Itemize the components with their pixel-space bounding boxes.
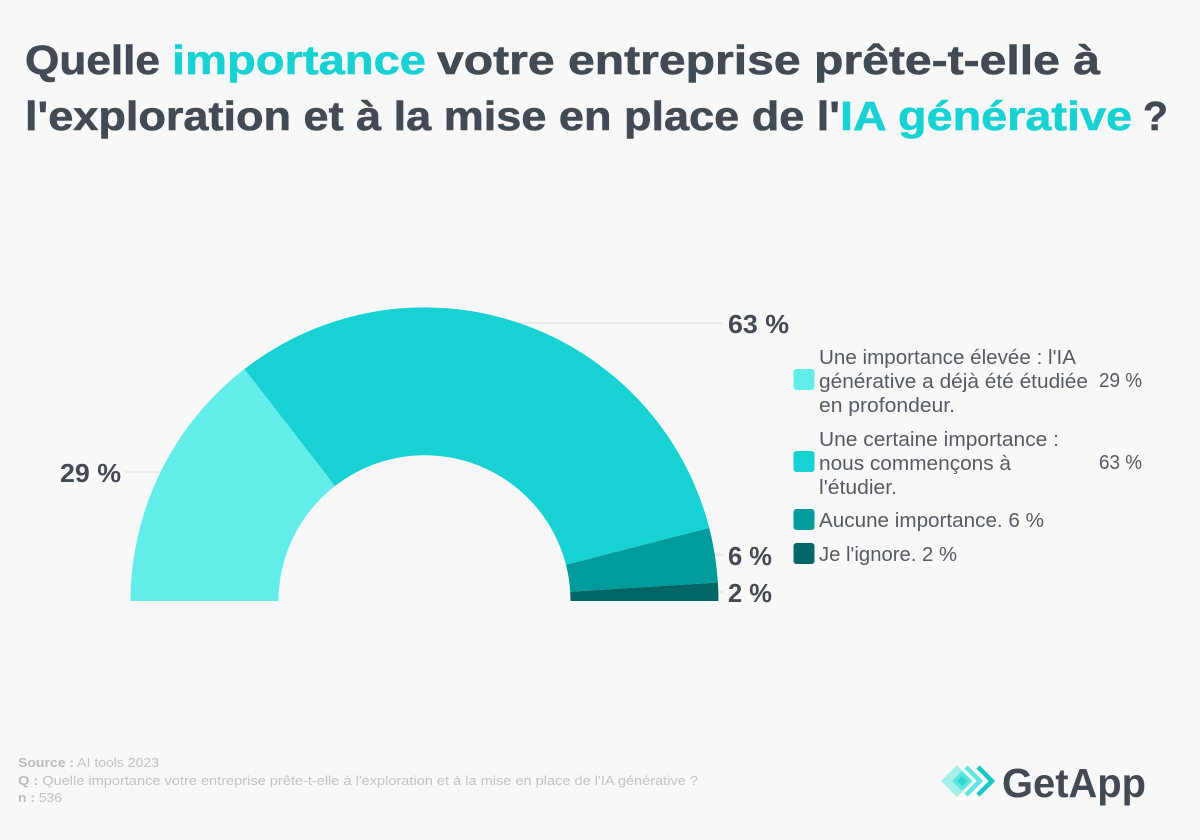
semi-donut chart	[60, 307, 789, 608]
source notes	[18, 755, 698, 805]
segment: 6 %	[566, 528, 718, 592]
leader lines	[125, 323, 724, 592]
data labels: 6 %	[728, 541, 772, 571]
legend item: 29 %: en profondeur.	[819, 395, 955, 417]
data labels	[60, 309, 789, 608]
title: IA générative	[840, 93, 1132, 139]
segment: 63 %	[244, 307, 709, 565]
legend item: 63 %: 63 %	[1099, 452, 1142, 474]
source notes: n : 536	[18, 790, 62, 805]
legend item: 29 %: générative a déjà été étudiée	[819, 371, 1088, 393]
legend item: 6 %: Aucune importance. 6 %	[819, 510, 1044, 532]
title: l'exploration et à la mise en place de l'	[25, 93, 840, 139]
legend item: 2 %: Je l'ignore. 2 %	[819, 544, 957, 566]
title: importance	[172, 37, 426, 83]
legend item: 29 %: 29 %	[1099, 370, 1142, 392]
legend item: 63 %	[794, 429, 1142, 499]
data labels: 63 %	[728, 309, 789, 339]
legend item: 29 %: Une importance élevée : l'IA	[819, 347, 1077, 369]
data labels: 29 %	[60, 458, 121, 488]
legend item: 29 %	[794, 347, 1142, 417]
legend item: 63 %: Une certaine importance :	[819, 429, 1059, 451]
GetApp logo	[941, 760, 1146, 806]
legend item: 63 %: l'étudier.	[819, 477, 897, 499]
data labels: 2 %	[728, 578, 772, 608]
legend	[794, 347, 1142, 566]
segment: 2 %	[570, 582, 718, 601]
title	[25, 37, 1168, 139]
legend item: 63 %: nous commençons à	[819, 453, 1012, 475]
source notes: Q : Quelle importance votre entreprise prête-t-elle à l'exploration et à la mise en place de l'IA générative ?	[18, 773, 698, 788]
title: Quelle	[25, 37, 160, 83]
icon: chevron diamonds	[941, 765, 992, 797]
source notes: Source : AI tools 2023	[18, 755, 159, 770]
title: ?	[1143, 93, 1168, 139]
segment: 29 %	[130, 369, 335, 601]
title: votre entreprise prête-t-elle à	[437, 37, 1100, 83]
wordmark: GetApp	[1002, 760, 1146, 806]
